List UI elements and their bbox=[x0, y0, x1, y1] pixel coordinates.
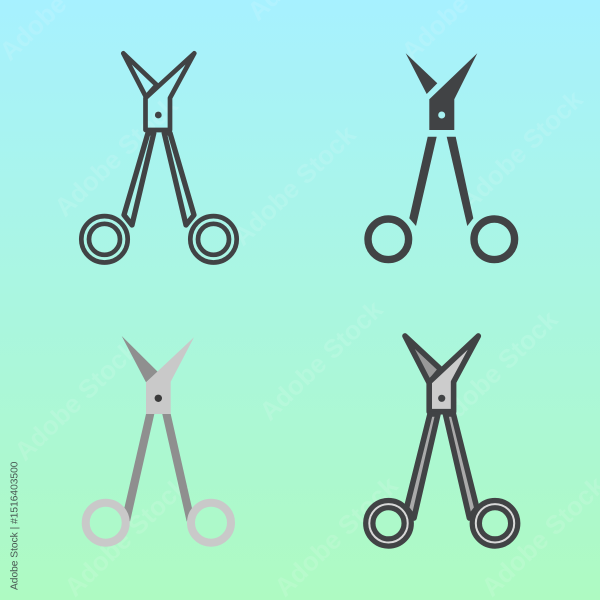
icon: flat grey scissors bbox=[86, 336, 231, 543]
watermarks: Adobe Stock bbox=[48, 90, 184, 222]
watermarks: Adobe Stock bbox=[268, 470, 404, 600]
stock id text: Adobe Stock | #1516403500 bbox=[10, 461, 20, 590]
watermarks: Adobe Stock bbox=[8, 334, 144, 466]
icon: outlined scissors bbox=[81, 53, 237, 262]
watermarks: Adobe Stock bbox=[253, 294, 389, 426]
icon: filled outline scissors bbox=[369, 336, 514, 542]
watermarks: Adobe Stock bbox=[428, 304, 564, 436]
watermarks: Adobe Stock bbox=[226, 119, 362, 251]
icon: solid scissors bbox=[368, 53, 515, 260]
watermarks: Adobe Stock bbox=[58, 470, 194, 600]
watermarks: Adobe Stock bbox=[453, 84, 589, 216]
